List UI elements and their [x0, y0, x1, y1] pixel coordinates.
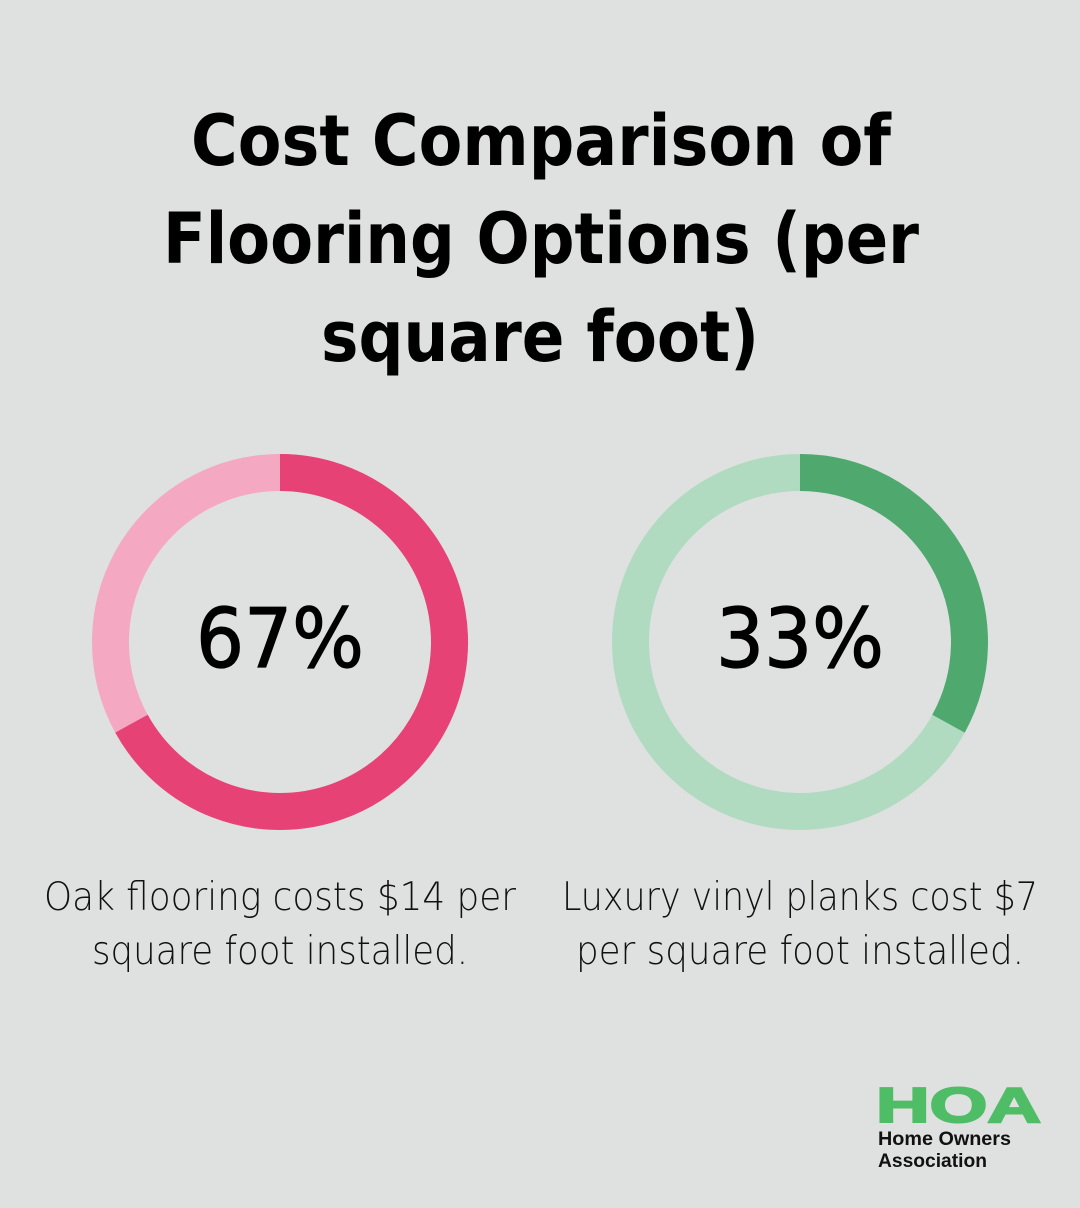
caption: oak flooring [44, 875, 516, 974]
title: Flooring Options (per [163, 198, 919, 280]
donut chart: oak flooring 67%: 67% [196, 592, 364, 687]
caption: luxury vinyl: per square foot installed. [576, 929, 1024, 974]
caption: luxury vinyl: Luxury vinyl planks cost $7 [562, 875, 1038, 920]
donut chart: luxury vinyl 33%: 33% [716, 592, 884, 687]
logo: HOA Home Owners Association: HOA [876, 1079, 1041, 1133]
caption: oak flooring: square foot installed. [92, 929, 468, 974]
donut chart: luxury vinyl 33% [630, 472, 970, 812]
title: square foot) [321, 296, 759, 378]
title: Cost Comparison of [191, 100, 892, 182]
logo: HOA Home Owners Association [876, 1079, 1041, 1172]
caption: luxury vinyl [562, 875, 1038, 974]
title [163, 100, 919, 378]
donut chart: oak flooring 67% [110, 472, 450, 812]
caption: oak flooring: Oak flooring costs $14 per [44, 875, 516, 920]
logo: HOA Home Owners Association: Association [878, 1151, 987, 1172]
logo: HOA Home Owners Association: Home Owners [878, 1129, 1011, 1150]
